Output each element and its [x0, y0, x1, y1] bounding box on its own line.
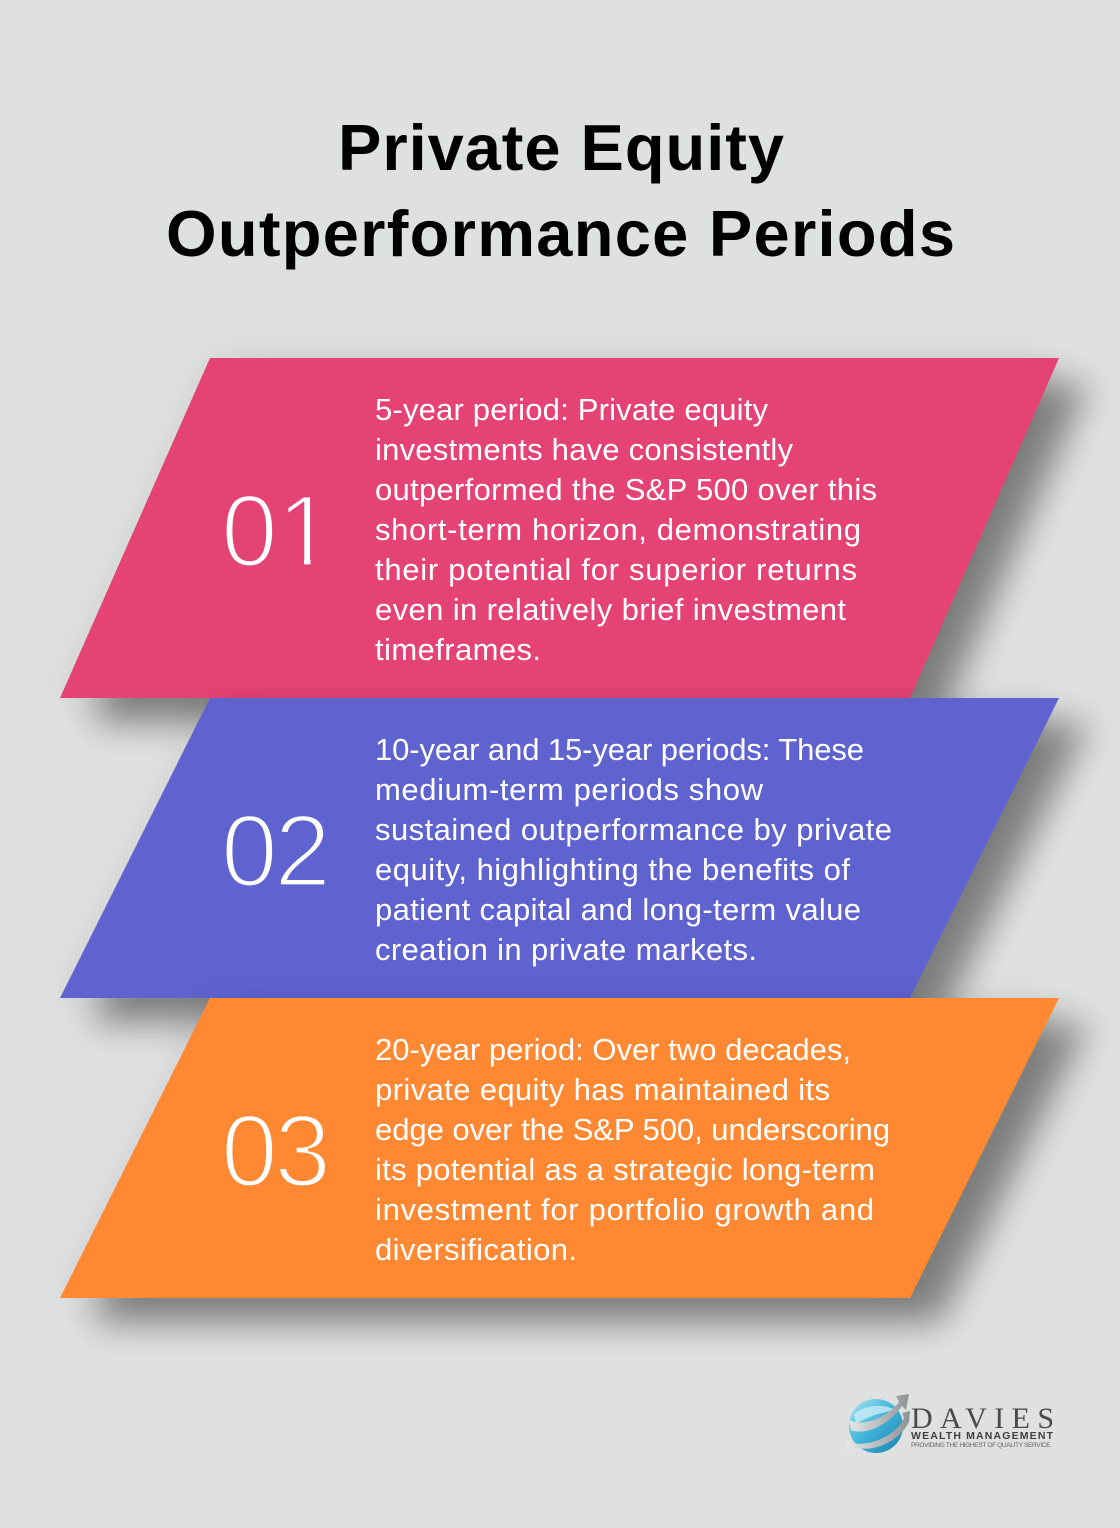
text: five-year period: 5-year period: Private equity [375, 392, 768, 427]
wordmark: DAVIES [911, 1402, 1054, 1435]
text: five-year period: outperformed the S&P 500 over this [375, 472, 877, 507]
title: Outperformance Periods [166, 197, 955, 270]
text: ten and fifteen-year periods: creation in private markets. [375, 932, 757, 967]
number 03: 03 [221, 1094, 331, 1208]
panel: 03 twenty-year period [60, 998, 1089, 1323]
logo: Davies Wealth Management [846, 1394, 1054, 1453]
title: Private Equity [338, 111, 784, 184]
text: twenty-year period: its potential as a strategic long-term [375, 1152, 875, 1187]
text: twenty-year period: private equity has maintained its [375, 1072, 830, 1107]
text: twenty-year period: investment for portfolio growth and [375, 1192, 874, 1227]
logo: Davies Wealth Management: WEALTH MANAGEMENT [911, 1430, 1054, 1442]
text: five-year period: timeframes. [375, 632, 541, 667]
icon: globe with arrows [846, 1394, 910, 1453]
text: five-year period: their potential for superior returns [375, 552, 857, 587]
text: ten and fifteen-year periods: 10-year and 15-year periods: These [375, 732, 864, 767]
text: five-year period: investments have consistently [375, 432, 794, 467]
text: ten and fifteen-year periods [375, 732, 892, 967]
panel: 01 five-year period [60, 358, 1089, 723]
text: ten and fifteen-year periods: sustained outperformance by private [375, 812, 892, 847]
text: ten and fifteen-year periods: patient capital and long-term value [375, 892, 861, 927]
number 02: 02 [221, 794, 331, 908]
text: ten and fifteen-year periods: equity, highlighting the benefits of [375, 852, 850, 887]
text: twenty-year period: edge over the S&P 500, underscoring [375, 1112, 890, 1147]
text: ten and fifteen-year periods: medium-term periods show [375, 772, 764, 807]
text: twenty-year period [375, 1032, 890, 1267]
text: five-year period: short-term horizon, demonstrating [375, 512, 861, 547]
text: five-year period [375, 392, 877, 667]
panel: 02 ten and fifteen-year periods [60, 698, 1089, 1023]
number 01: 01 [221, 474, 334, 588]
text: twenty-year period: diversification. [375, 1232, 577, 1267]
title [166, 111, 955, 270]
text: five-year period: even in relatively brief investment [375, 592, 846, 627]
logo: Davies Wealth Management: PROVIDING THE HIGHEST OF QUALITY SERVICE. [911, 1442, 1052, 1449]
text: twenty-year period: 20-year period: Over two decades, [375, 1032, 851, 1067]
